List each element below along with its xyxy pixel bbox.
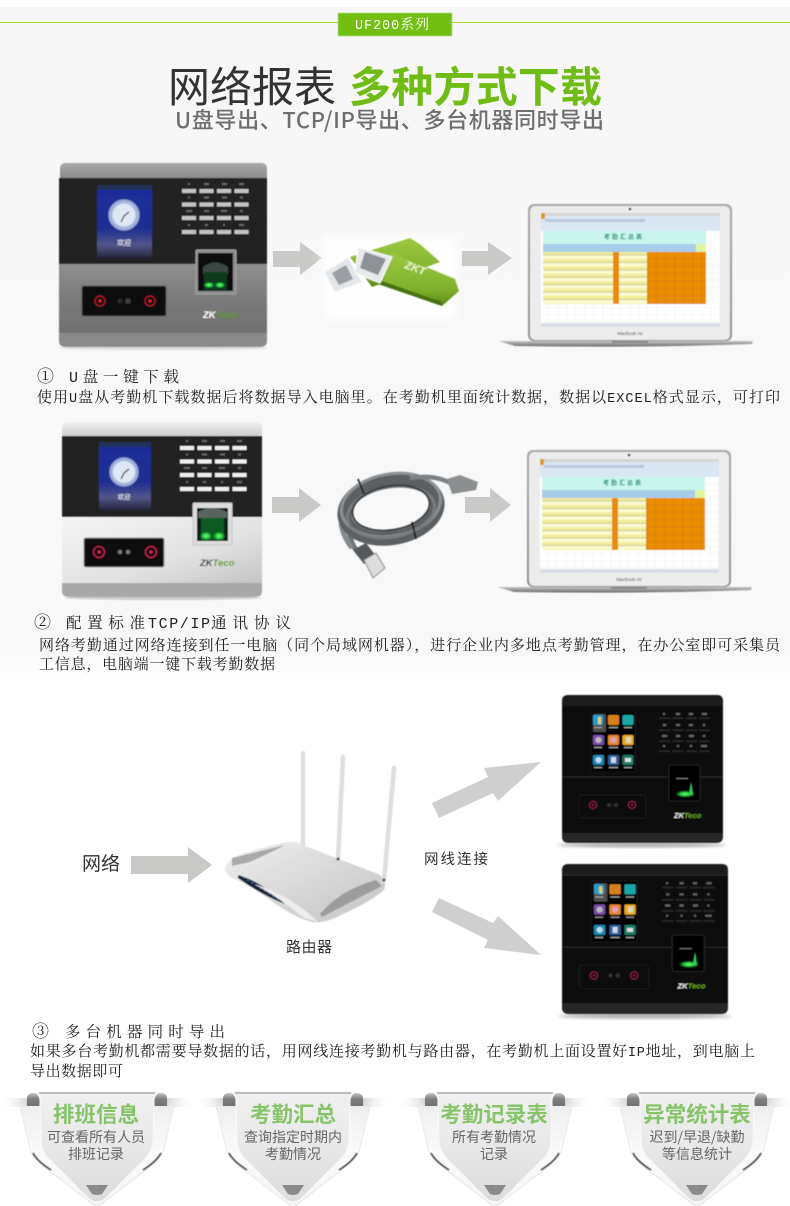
badge: attendance records	[398, 1092, 592, 1206]
badge: exception stats	[600, 1092, 790, 1206]
device: black terminal lower	[558, 864, 731, 1019]
badge: shift info: 排班记录	[68, 1144, 124, 1164]
icon: USB drives	[322, 236, 459, 320]
badge: exception stats: 迟到/早退/缺勤	[650, 1127, 744, 1147]
step 3 heading: ③	[32, 1022, 49, 1041]
title	[168, 54, 602, 115]
step 1 description: 使用U盘从考勤机下载数据后将数据导入电脑里。在考勤机里面统计数据，数据以EXCEL格式显示，可打印	[37, 388, 780, 407]
step 2 heading: 通讯协议	[211, 614, 291, 632]
step 3 description	[30, 1042, 755, 1080]
header: series line and tag	[0, 13, 790, 36]
arrow: device to USB	[273, 242, 322, 275]
arrow: USB to laptop	[462, 242, 512, 275]
badge: exception stats: 等信息统计	[662, 1144, 732, 1164]
badge: shift info: 排班信息	[53, 1098, 139, 1129]
badge: attendance summary: 考勤汇总	[250, 1098, 336, 1129]
step 2 heading: 配置标准	[66, 614, 145, 632]
device: black terminal lower: ZKTeco	[676, 982, 706, 991]
laptop with attendance spreadsheet 1	[498, 204, 753, 347]
badge: shift info: 可查看所有人员	[47, 1127, 145, 1147]
step 2 description	[39, 636, 781, 673]
step 1 heading	[37, 367, 179, 387]
icon: network cable	[336, 466, 478, 578]
badge: exception stats: 异常统计表	[643, 1098, 751, 1129]
step 1 heading: ①	[37, 367, 54, 386]
device: silver attendance terminal	[62, 422, 262, 600]
step 1 heading: U 盘一键下载	[69, 368, 179, 387]
label: network: 网络	[82, 849, 120, 876]
laptop with attendance spreadsheet 2: MacBook Air	[616, 577, 642, 582]
device: gray attendance terminal: ZKTeco	[202, 310, 238, 321]
subtitle: U盘导出、TCP/IP导出、多台机器同时导出	[175, 103, 604, 135]
arrow: cable to laptop	[465, 488, 511, 522]
step 3 description: 导出数据即可	[30, 1062, 123, 1080]
title: 多种方式下载	[349, 54, 602, 115]
step 2 heading	[34, 613, 291, 633]
badge: attendance summary: 查询指定时期内	[244, 1127, 342, 1147]
step 2 heading: ②	[34, 613, 51, 632]
label: router: 路由器	[286, 936, 332, 957]
arrow: device to cable	[272, 488, 321, 522]
step 2 description: 工信息，电脑端一键下载考勤数据	[39, 655, 275, 673]
step 3 description: 如果多台考勤机都需要导数据的话，用网线连接考勤机与路由器，在考勤机上面设置好IP地址，到电脑上	[30, 1042, 755, 1061]
badge: attendance records: 记录	[480, 1144, 508, 1164]
badge: shift info	[0, 1092, 194, 1206]
step 2 heading: TCP/IP	[148, 616, 210, 633]
arrow: router to lower device	[432, 898, 541, 955]
device: silver attendance terminal: ZKTeco	[199, 558, 235, 569]
icon: USB drives: ZKT	[402, 259, 428, 279]
device: gray attendance terminal	[58, 163, 268, 350]
badge: attendance records: 考勤记录表	[440, 1098, 548, 1129]
header: series line and tag: UF200系列	[355, 17, 429, 34]
device: black terminal upper	[558, 695, 726, 848]
page background	[0, 7, 790, 680]
icon: router	[225, 753, 394, 922]
device: gray attendance terminal: 欢迎	[117, 238, 131, 248]
laptop with attendance spreadsheet 2: 考勤汇总表	[603, 478, 643, 487]
label: network cable connection: 网线连接	[424, 848, 488, 869]
badge: attendance summary: 考勤情况	[265, 1144, 321, 1164]
laptop with attendance spreadsheet 2	[497, 450, 752, 593]
laptop with attendance spreadsheet 1: MacBook Air	[617, 331, 643, 336]
step 3 heading: 多台机器同时导出	[65, 1023, 225, 1041]
badge: attendance records: 所有考勤情况	[452, 1127, 536, 1147]
badge: attendance summary	[196, 1092, 390, 1206]
step 2 description: 网络考勤通过网络连接到任一电脑（同个局域网机器），进行企业内多地点考勤管理，在办公室即可采集员	[39, 636, 781, 654]
device: black terminal upper: ZKTeco	[673, 811, 702, 820]
device: silver attendance terminal: 欢迎	[118, 491, 131, 501]
laptop with attendance spreadsheet 1: 考勤汇总表	[604, 232, 644, 241]
title: 网络报表	[168, 54, 336, 115]
arrow: router to upper device	[432, 762, 541, 818]
arrow: network to router	[131, 847, 212, 883]
